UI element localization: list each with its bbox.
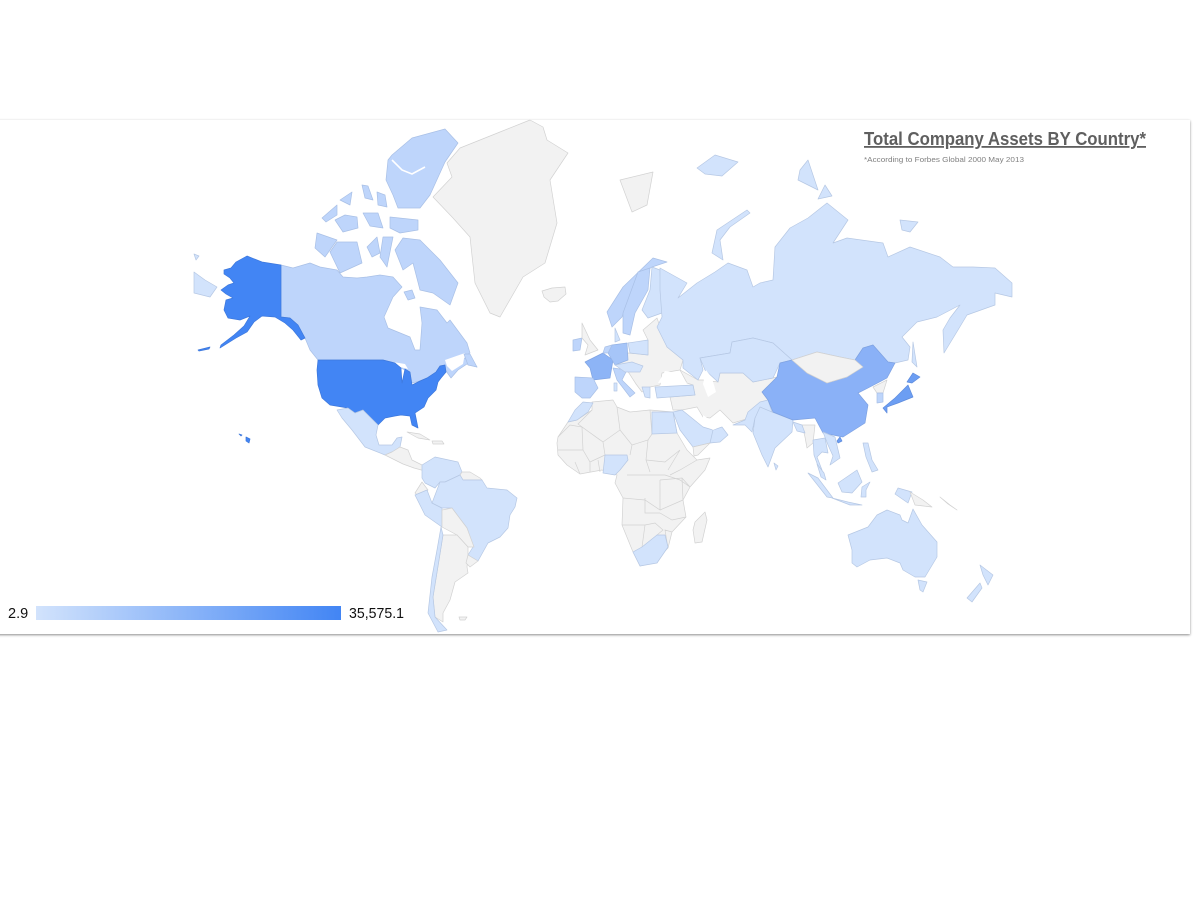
- Eastern Europe and Balkans: [615, 318, 683, 392]
- Oceania: [848, 497, 993, 602]
- Saudi Arabia: [673, 410, 717, 447]
- Caspian Sea: [703, 370, 716, 397]
- Peru: [415, 490, 442, 527]
- Greece: [642, 387, 650, 398]
- Java: [832, 498, 862, 505]
- Great Lakes: [393, 362, 408, 369]
- Newfoundland: [464, 354, 477, 367]
- Myanmar: [802, 425, 815, 448]
- Gulf of St Lawrence: [445, 353, 465, 371]
- Ecuador: [415, 482, 428, 497]
- subtitle: *According to Forbes Global 2000 May 2013: [864, 155, 1024, 164]
- South Africa: [633, 535, 668, 566]
- Madagascar: [693, 512, 707, 543]
- Novaya Zemlya: [712, 210, 750, 260]
- legend maximum: 35,575.1: [349, 606, 404, 622]
- Mexico: [337, 408, 402, 455]
- Guianas: [460, 472, 482, 480]
- Poland: [628, 340, 648, 355]
- Pakistan: [733, 400, 772, 432]
- world map: [194, 120, 1012, 632]
- Alaska: [220, 256, 305, 348]
- Germany: [608, 343, 628, 365]
- Greenland: [433, 120, 568, 317]
- Kazakhstan: [700, 338, 792, 382]
- India: [753, 407, 793, 467]
- Benelux: [603, 345, 612, 353]
- Black Sea: [658, 371, 687, 383]
- Chukotka edge: [194, 272, 217, 297]
- Borneo: [838, 470, 862, 493]
- Indonesian Papua: [895, 488, 912, 503]
- Malay Peninsula: [817, 464, 826, 480]
- Sumatra: [808, 473, 833, 498]
- Falkland Islands: [459, 617, 467, 620]
- United Kingdom: [582, 323, 598, 355]
- North Korea: [873, 380, 887, 393]
- Bangladesh and Bhutan: [793, 422, 805, 433]
- Franz Josef Land: [697, 155, 738, 176]
- Finland: [642, 267, 662, 318]
- Asia: [655, 155, 1012, 507]
- Argentina: [433, 535, 468, 622]
- New Zealand: [967, 565, 993, 602]
- legend minimum: 2.9: [8, 606, 28, 622]
- title: Total Company Assets BY Country*: [864, 129, 1146, 149]
- legend: [8, 606, 404, 622]
- Canada mainland: [281, 263, 477, 383]
- Contiguous United States: [317, 360, 446, 428]
- South America: [415, 457, 517, 632]
- Chile: [428, 527, 447, 632]
- Canadian Arctic islands: [315, 129, 458, 305]
- Ellesmere fjord: [392, 160, 425, 174]
- Aleutians: [198, 347, 210, 351]
- Yemen: [693, 443, 710, 456]
- Africa: [557, 400, 710, 566]
- Japan: [883, 373, 920, 413]
- Taiwan: [837, 437, 842, 443]
- Central America: [385, 447, 425, 471]
- Thailand: [813, 438, 828, 470]
- Russia: [657, 203, 1012, 380]
- Hungary and Austria: [615, 362, 643, 372]
- Ireland: [573, 338, 582, 351]
- Persian Gulf: [703, 415, 720, 430]
- Tasmania: [918, 580, 927, 592]
- Turkey: [655, 385, 695, 398]
- Sakhalin: [912, 342, 917, 367]
- Egypt: [652, 412, 677, 434]
- Australia: [848, 509, 937, 577]
- Denmark: [615, 328, 620, 342]
- legend gradient bar: [36, 606, 341, 620]
- Hawaii: [246, 437, 250, 443]
- Severnaya Zemlya: [798, 160, 818, 190]
- panel: map card: [0, 120, 1190, 634]
- South Korea: [877, 393, 883, 403]
- Europe: [573, 172, 683, 398]
- Vietnam and Laos: [823, 432, 840, 465]
- Sulawesi: [861, 482, 870, 497]
- Morocco: [568, 402, 593, 422]
- Svalbard: [620, 172, 653, 212]
- North America: [194, 120, 568, 471]
- Sweden: [623, 268, 650, 335]
- New Siberian Islands: [900, 220, 918, 232]
- Bolivia and Paraguay: [442, 508, 474, 547]
- Pacific islands: [940, 497, 957, 510]
- Sicily and Sardinia: [614, 383, 617, 391]
- Colombia and Venezuela: [422, 457, 462, 488]
- Philippines: [863, 443, 878, 472]
- Sri Lanka: [774, 463, 778, 470]
- Iceland: [542, 287, 566, 302]
- China: [762, 345, 895, 437]
- France: [585, 353, 613, 380]
- Spain and Portugal: [575, 377, 598, 398]
- African mainland: [557, 400, 710, 566]
- Uruguay: [466, 555, 478, 567]
- Nigeria: [603, 455, 628, 475]
- Brazil: [432, 475, 517, 561]
- Central Asia and Middle East: [670, 370, 777, 423]
- Papua New Guinea: [910, 492, 932, 507]
- Norway: [607, 258, 667, 327]
- Italy: [613, 368, 635, 397]
- Mongolia: [792, 352, 863, 383]
- Oman and UAE: [710, 427, 728, 443]
- African borders: [558, 407, 697, 548]
- Caribbean: [407, 432, 430, 440]
